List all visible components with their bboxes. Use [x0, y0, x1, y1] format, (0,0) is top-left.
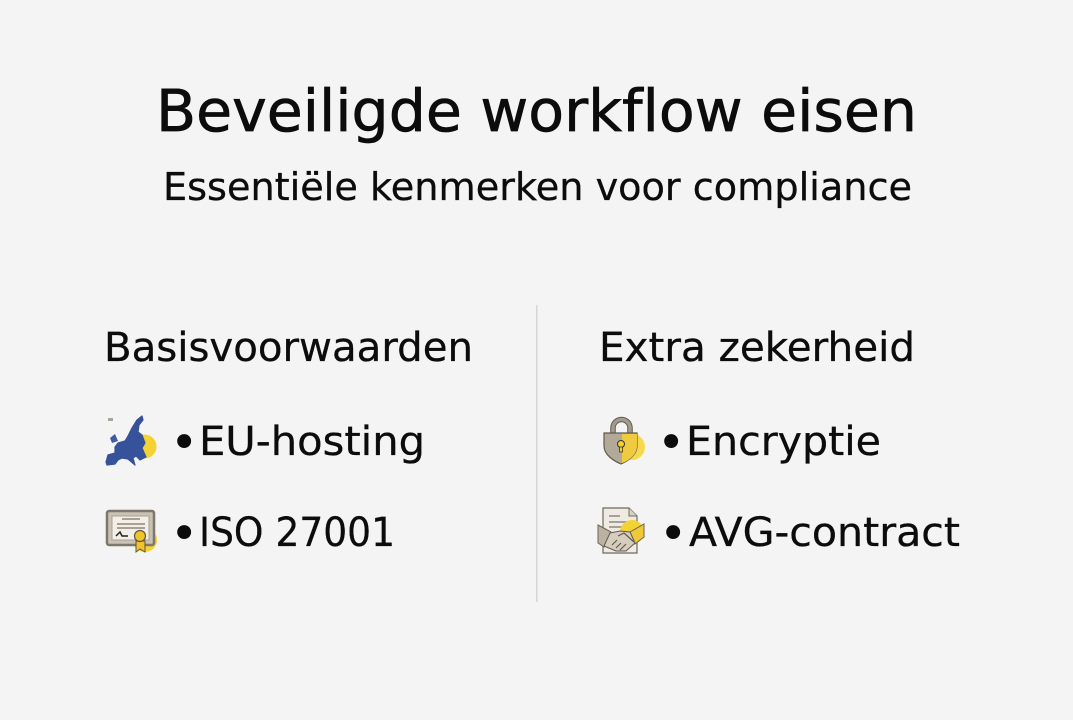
- icon: EU map: [106, 416, 156, 465]
- title: Beveiligde workflow eisen: [156, 77, 917, 145]
- icon: contract handshake: [598, 508, 644, 553]
- subtitle: Essentiële kenmerken voor compliance: [163, 165, 912, 209]
- bullet item: EU-hosting: EU-hosting: [199, 419, 425, 465]
- heading: extra zekerheid: Extra zekerheid: [599, 325, 915, 371]
- divider: [536, 305, 538, 602]
- icon: certificate: [107, 511, 157, 552]
- bullet: Encryptie: •: [657, 415, 685, 471]
- bullet item: ISO 27001: ISO 27001: [199, 510, 395, 556]
- bullet: ISO 27001: •: [170, 506, 198, 562]
- panel: extra zekerheid: [598, 325, 960, 562]
- bullet item: AVG-contract: AVG-contract: [689, 510, 960, 556]
- panel: basisvoorwaarden: [104, 325, 473, 562]
- bullet: EU-hosting: •: [170, 415, 198, 471]
- bullet item: Encryptie: Encryptie: [686, 419, 881, 465]
- heading: basisvoorwaarden: Basisvoorwaarden: [104, 325, 473, 371]
- bullet: AVG-contract: •: [659, 506, 687, 562]
- icon: padlock shield: [604, 420, 645, 464]
